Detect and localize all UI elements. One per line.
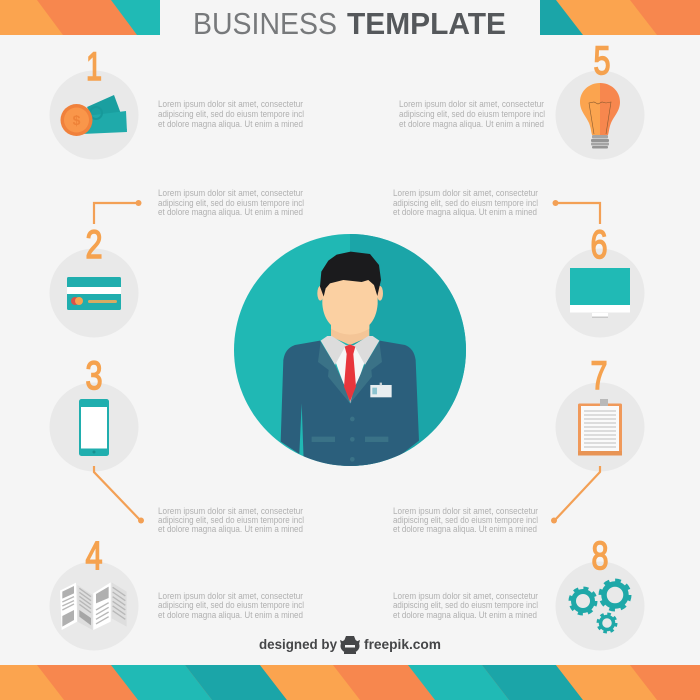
bottom color band — [0, 665, 700, 700]
item 7: number, icon circle, clipboard icon: 7 — [590, 354, 608, 398]
item 5 text: adipiscing elit, sed do eiusm tempore incl — [399, 109, 545, 119]
jacket pockets and buttons — [312, 417, 388, 462]
item 7 text — [393, 506, 538, 534]
item 5: number, icon circle, light bulb icon: 5 — [594, 39, 610, 83]
item 4: number, icon circle, folded map icon: 4 — [86, 534, 102, 578]
footer credit: freepik.com — [364, 637, 441, 652]
item 2 text — [158, 188, 304, 217]
collar — [321, 336, 379, 365]
item 2: number, icon circle, credit card icon: 2 — [86, 223, 102, 267]
item 7 text: et dolore magna aliqua. Ut enim a mined — [393, 524, 537, 534]
title: BUSINESS — [193, 7, 337, 41]
freepik logo icon — [340, 636, 360, 654]
top right color band — [540, 0, 700, 35]
item 5 text — [399, 99, 545, 129]
item 1: number, icon circle, money icon: $ — [73, 112, 81, 128]
suit jacket — [281, 341, 419, 470]
item 2: number, icon circle, credit card icon — [50, 223, 138, 338]
item 3 text — [158, 506, 304, 534]
item 7 text: adipiscing elit, sed do eiusm tempore incl — [393, 515, 538, 525]
title: TEMPLATE — [347, 7, 506, 41]
item 4 text: et dolore magna aliqua. Ut enim a mined — [158, 610, 303, 620]
top left color band — [0, 0, 160, 35]
item 1 text: Lorem ipsum dolor sit amet, consectetur — [158, 99, 303, 109]
item 8: number, icon circle, gears icon: 8 — [592, 534, 608, 578]
item 2 text: et dolore magna aliqua. Ut enim a mined — [158, 207, 303, 217]
connector to item 3 — [94, 466, 144, 524]
item 1 text: et dolore magna aliqua. Ut enim a mined — [158, 119, 303, 129]
item 4 text: adipiscing elit, sed do eiusm tempore incl — [158, 600, 304, 610]
hair — [320, 252, 381, 297]
item 2 text: Lorem ipsum dolor sit amet, consectetur — [158, 188, 303, 198]
item 6 text — [393, 188, 538, 217]
item 3 text: Lorem ipsum dolor sit amet, consectetur — [158, 506, 303, 516]
connector to item 6 — [552, 200, 600, 224]
footer credit: designed by — [259, 637, 337, 652]
title — [193, 7, 506, 41]
name badge — [370, 383, 392, 397]
item 4: number, icon circle, folded map icon — [50, 534, 138, 650]
item 1 text — [158, 99, 304, 129]
item 5 text: et dolore magna aliqua. Ut enim a mined — [399, 119, 544, 129]
connector to item 7 — [551, 466, 600, 524]
item 6 text: Lorem ipsum dolor sit amet, consectetur — [393, 188, 538, 198]
item 6: number, icon circle, monitor icon: 6 — [590, 223, 608, 267]
item 8: number, icon circle, gears icon — [556, 534, 644, 650]
neck — [331, 324, 370, 345]
item 8 text: adipiscing elit, sed do eiusm tempore incl — [393, 600, 538, 610]
item 5 text: Lorem ipsum dolor sit amet, consectetur — [399, 99, 544, 109]
item 8 text: et dolore magna aliqua. Ut enim a mined — [393, 610, 537, 620]
item 2 text: adipiscing elit, sed do eiusm tempore incl — [158, 198, 304, 208]
item 8 text: Lorem ipsum dolor sit amet, consectetur — [393, 591, 538, 601]
item 3: number, icon circle, phone icon — [50, 354, 138, 472]
item 5: number, icon circle, light bulb icon — [556, 39, 644, 160]
connector to item 2 — [94, 200, 142, 224]
item 4 text: Lorem ipsum dolor sit amet, consectetur — [158, 591, 303, 601]
item 4 text — [158, 591, 304, 620]
item 7: number, icon circle, clipboard icon — [556, 354, 644, 472]
face — [322, 278, 378, 335]
item 6: number, icon circle, monitor icon — [556, 223, 644, 338]
shirt — [336, 345, 364, 404]
central businessman illustration — [234, 234, 466, 470]
item 6 text: adipiscing elit, sed do eiusm tempore incl — [393, 198, 538, 208]
item 3 text: et dolore magna aliqua. Ut enim a mined — [158, 524, 303, 534]
lapels — [318, 342, 382, 403]
tie — [344, 344, 356, 402]
footer credit — [259, 636, 441, 654]
item 3: number, icon circle, phone icon: 3 — [86, 354, 102, 398]
item 8 text — [393, 591, 538, 620]
item 6 text: et dolore magna aliqua. Ut enim a mined — [393, 207, 537, 217]
item 7 text: Lorem ipsum dolor sit amet, consectetur — [393, 506, 538, 516]
item 1: number, icon circle, money icon — [50, 45, 138, 160]
item 1: number, icon circle, money icon: 1 — [86, 45, 102, 89]
ears — [317, 286, 383, 301]
item 3 text: adipiscing elit, sed do eiusm tempore incl — [158, 515, 304, 525]
item 1 text: adipiscing elit, sed do eiusm tempore incl — [158, 109, 304, 119]
